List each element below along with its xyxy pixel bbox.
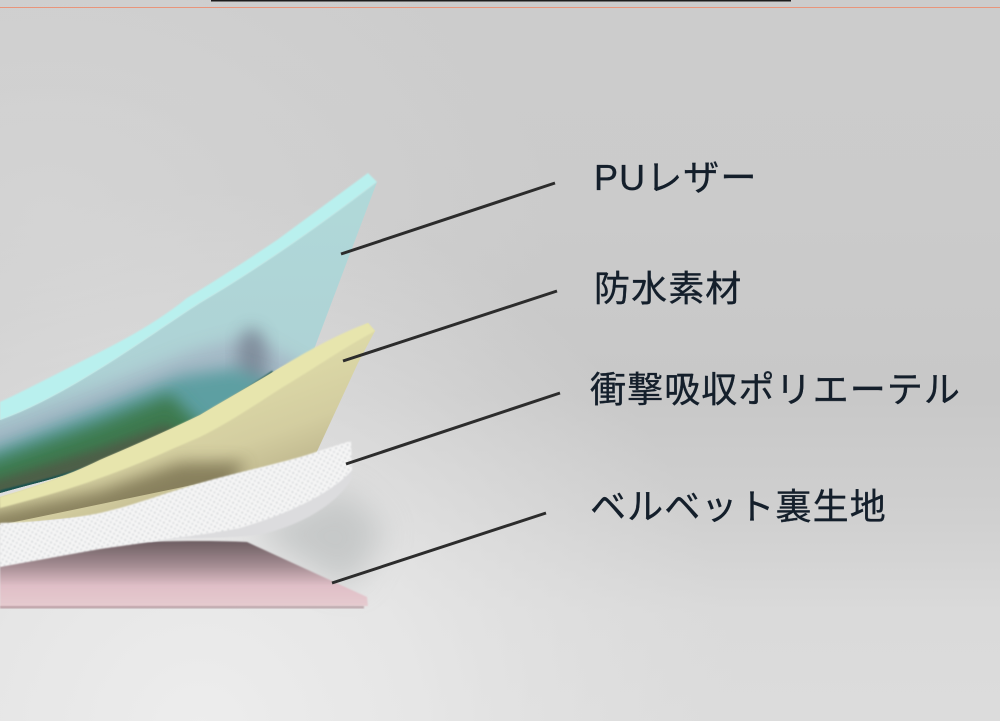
- layer: yellow waterproof material: [0, 323, 375, 545]
- leader line: polyether: [346, 393, 560, 464]
- leader line: waterproof material: [343, 291, 557, 361]
- layer: pink velvet backing: [0, 541, 368, 608]
- label: waterproof material: 防水素材: [594, 268, 742, 309]
- label: PU leather: PUレザー: [594, 157, 758, 198]
- leader line: PU leather: [341, 183, 555, 254]
- label: velvet backing: ベルベット裏生地: [590, 486, 887, 527]
- label: shock-absorbing polyether: 衝撃吸収ポリエーテル: [590, 369, 961, 410]
- layer: white shock-absorbing polyether: [0, 441, 352, 567]
- top edge strip: [0, 0, 1000, 8]
- leader line: velvet backing: [332, 513, 546, 583]
- layer: blue PU leather: [0, 173, 377, 493]
